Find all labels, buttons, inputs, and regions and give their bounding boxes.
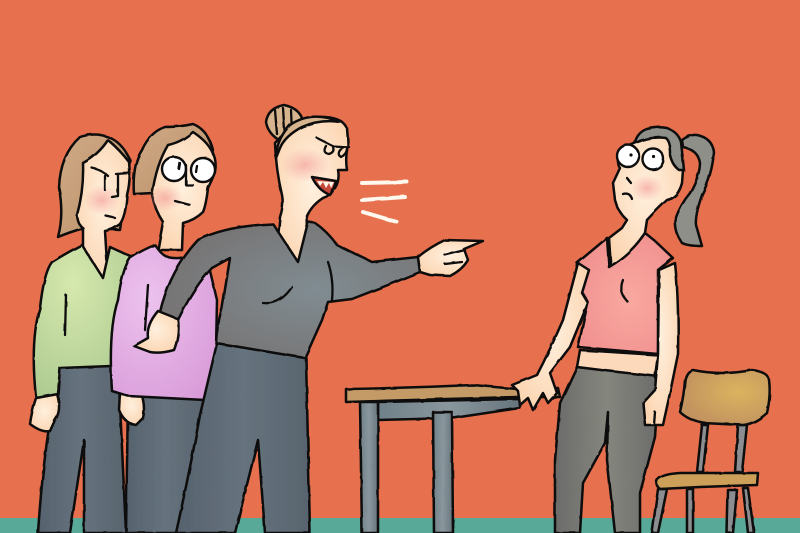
head and neck	[275, 117, 348, 270]
left arm and hand	[512, 263, 589, 410]
head and neck	[609, 130, 683, 268]
speech lines	[362, 182, 407, 222]
grey top	[160, 222, 420, 358]
figure: girl with ponytail	[512, 127, 714, 533]
pointing hand	[418, 240, 483, 276]
midriff	[577, 350, 658, 376]
trousers	[176, 343, 310, 533]
desk	[346, 385, 560, 533]
pink t-shirt	[577, 233, 673, 354]
trousers	[555, 367, 658, 533]
ponytail	[675, 135, 714, 246]
mouth with teeth	[312, 177, 336, 195]
angry eyes	[317, 138, 349, 157]
figure: central woman pointing	[134, 105, 483, 533]
right arm and hand	[643, 263, 678, 425]
hair sweep	[276, 117, 340, 158]
back hand	[134, 311, 178, 353]
figure: left woman in green	[30, 134, 132, 533]
wide eyes	[617, 145, 639, 167]
floor strip	[0, 518, 800, 533]
chair	[652, 370, 770, 533]
scene artwork	[30, 105, 770, 533]
figure: middle woman in purple with glasses	[111, 124, 217, 533]
hair bun	[266, 105, 302, 143]
grey hair	[635, 127, 684, 170]
